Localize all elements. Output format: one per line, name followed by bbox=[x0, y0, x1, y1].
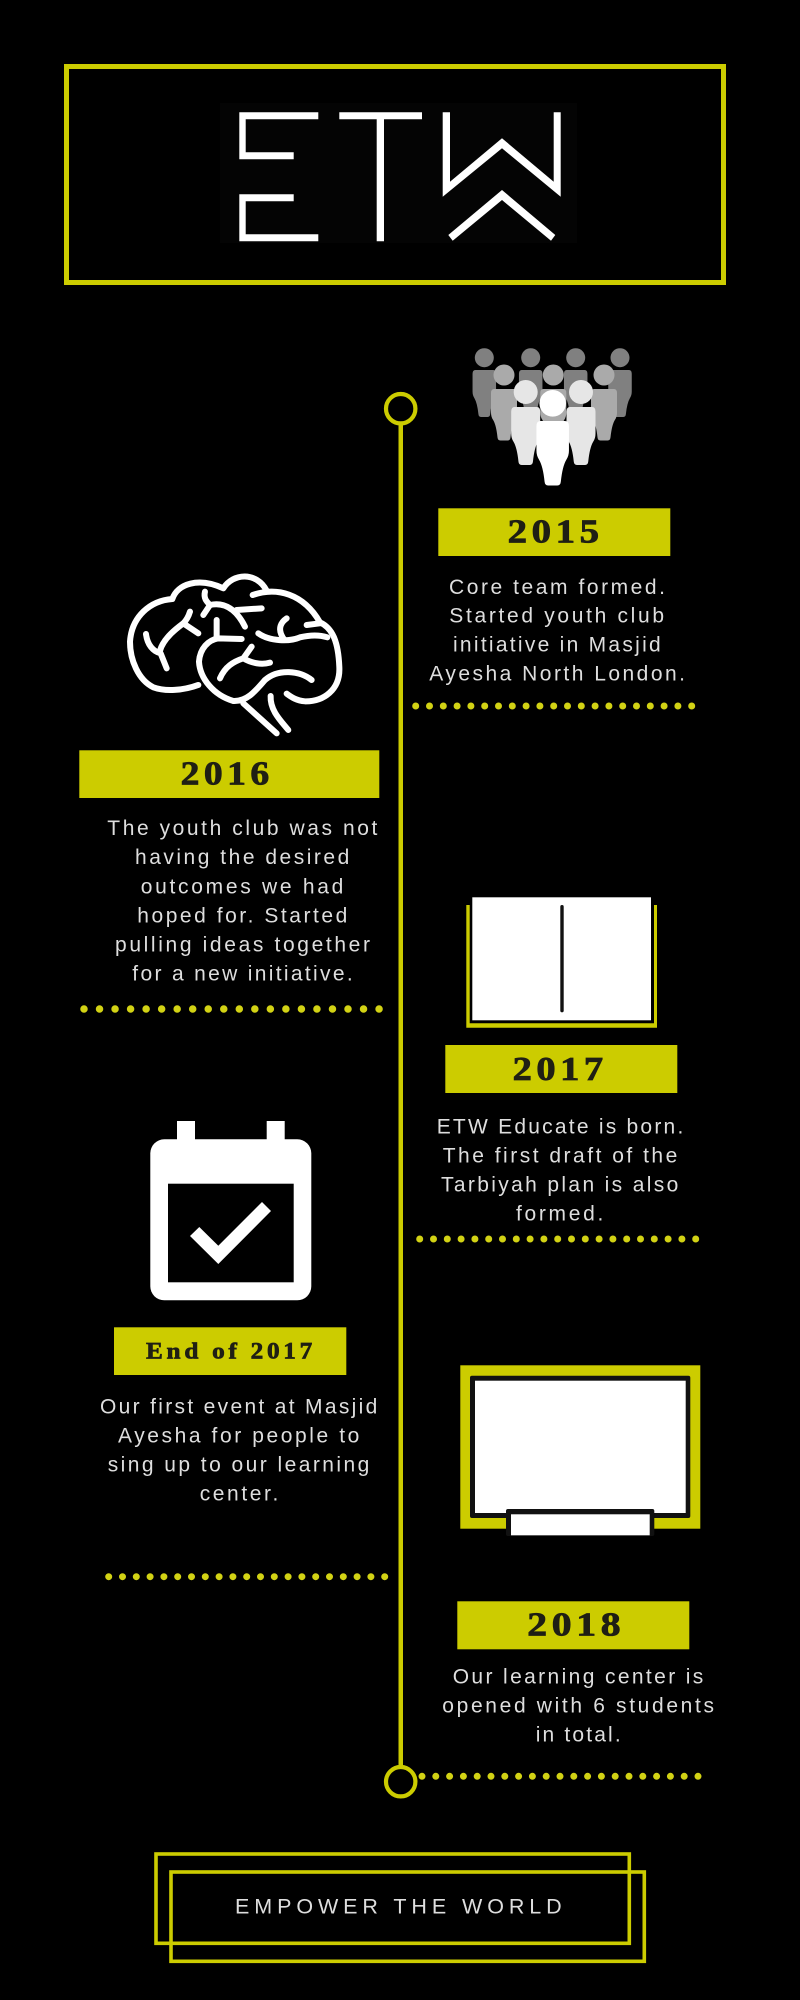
text block: 2017: ETW Educate is born. bbox=[437, 1115, 683, 1138]
icon: whiteboard bbox=[460, 1365, 700, 1536]
year label: 2016 bbox=[79, 750, 379, 798]
text block: End of 2017: sing up to our learning bbox=[108, 1453, 369, 1476]
text block: End of 2017: Our first event at Masjid bbox=[100, 1395, 377, 1418]
dotted divider: 2016 bbox=[84, 1005, 380, 1013]
text block: 2016: hoped for. Started bbox=[137, 904, 347, 927]
year label: 2018: 2018 bbox=[527, 1607, 625, 1644]
icon: open book bbox=[466, 897, 657, 1028]
text block: 2018: opened with 6 students bbox=[442, 1694, 714, 1717]
dotted divider: 2015 bbox=[416, 702, 692, 710]
text block: 2016: having the desired bbox=[135, 846, 349, 869]
year label: 2017: 2017 bbox=[513, 1051, 608, 1088]
text block: 2015: Started youth club bbox=[449, 605, 664, 628]
text block: End of 2017: center. bbox=[200, 1482, 278, 1505]
text block: 2015: initiative in Masjid bbox=[453, 634, 661, 657]
header panel with ETW logo bbox=[66, 66, 724, 282]
text block: 2017: The first draft of the bbox=[443, 1144, 677, 1167]
icon: brain bbox=[130, 576, 339, 733]
text block: 2017 bbox=[437, 1115, 683, 1225]
footer: double frame with tagline bbox=[156, 1854, 644, 1961]
text block: 2015: Ayesha North London. bbox=[429, 663, 685, 686]
dotted divider: 2018 bbox=[422, 1773, 699, 1780]
timeline: vertical line with end circles bbox=[386, 394, 415, 1796]
text block: 2016: for a new initiative. bbox=[132, 962, 353, 985]
text block: 2016: The youth club was not bbox=[107, 817, 377, 840]
text block: 2016: pulling ideas together bbox=[115, 933, 370, 956]
text block: 2018 bbox=[442, 1665, 714, 1746]
text block: 2017: formed. bbox=[516, 1202, 603, 1225]
tagline: EMPOWER THE WORLD bbox=[235, 1894, 562, 1918]
text block: 2016: outcomes we had bbox=[141, 875, 343, 898]
year label: 2015: 2015 bbox=[508, 514, 604, 551]
text block: 2018: Our learning center is bbox=[453, 1665, 703, 1688]
year label: 2016: 2016 bbox=[181, 755, 274, 792]
text block: End of 2017 bbox=[100, 1395, 377, 1505]
dotted divider: End of 2017 bbox=[109, 1573, 385, 1580]
icon: group of people bbox=[473, 348, 632, 486]
text block: 2016 bbox=[107, 817, 377, 985]
logo: ETW bbox=[220, 103, 577, 243]
text block: 2015 bbox=[429, 576, 685, 686]
text block: 2017: Tarbiyah plan is also bbox=[441, 1173, 678, 1196]
dotted divider: 2017 bbox=[420, 1236, 696, 1242]
year label: 2017 bbox=[445, 1045, 677, 1093]
year label: End of 2017 bbox=[114, 1327, 346, 1375]
year label: End of 2017: End of 2017 bbox=[146, 1338, 316, 1363]
text block: 2018: in total. bbox=[536, 1723, 621, 1746]
text block: End of 2017: Ayesha for people to bbox=[118, 1424, 359, 1447]
icon: calendar with check mark bbox=[150, 1121, 311, 1300]
year label: 2018 bbox=[457, 1601, 689, 1649]
text block: 2015: Core team formed. bbox=[449, 576, 665, 599]
year label: 2015 bbox=[438, 508, 670, 556]
